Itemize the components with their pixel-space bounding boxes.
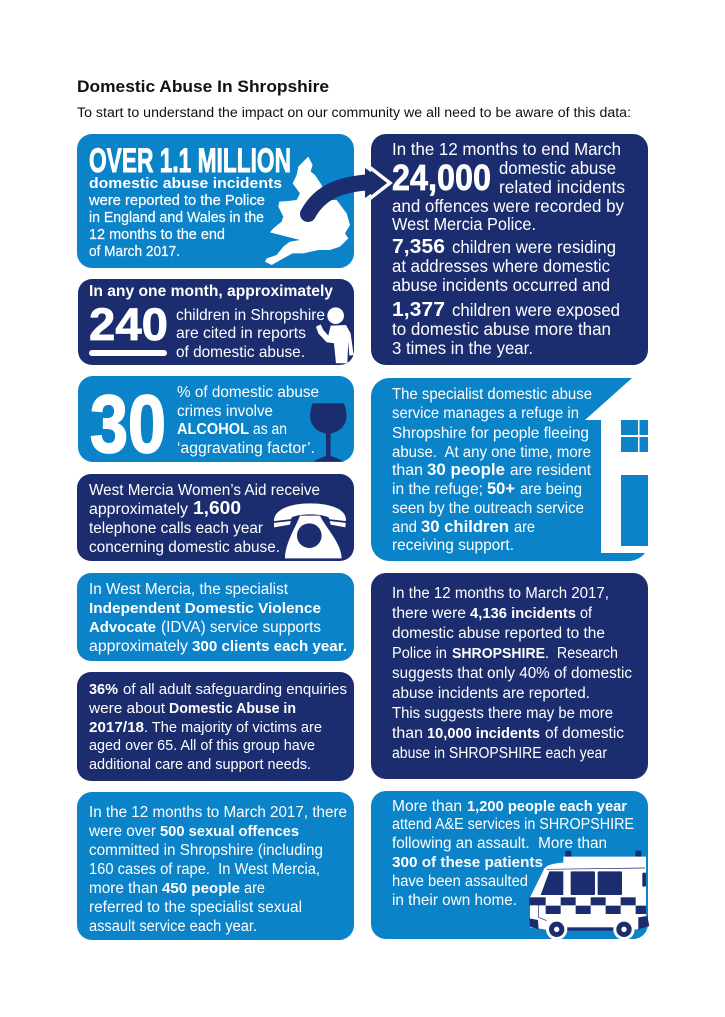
- panel text: in the refuge;: [392, 481, 483, 498]
- panel text: children were exposed: [452, 300, 620, 320]
- panel text: The specialist domestic abuse: [392, 386, 592, 403]
- panel: incidents in Shropshire: Police in: [392, 645, 447, 662]
- panel text: of domestic abuse.: [176, 344, 305, 361]
- panel text: 1,377: [392, 299, 445, 321]
- panel: IDVA service: 300 clients each year.: [192, 638, 347, 655]
- panel text: 3 times in the year.: [392, 338, 533, 358]
- panel: incidents in Shropshire: of domestic: [545, 725, 624, 742]
- icon: house window: [621, 420, 648, 452]
- icon: wine glass: [310, 403, 346, 462]
- panel text: of March 2017.: [89, 244, 180, 260]
- icon: house door: [621, 475, 648, 546]
- panel text: 30 people: [427, 460, 505, 479]
- panel: 240 children: [78, 279, 354, 365]
- panel: incidents in Shropshire: abuse in SHROPSHIRE each year: [392, 745, 607, 762]
- panel: sexual offences: are: [244, 880, 265, 897]
- panel text: were reported to the Police: [88, 193, 265, 209]
- panel text: as an: [253, 421, 287, 438]
- panel: incidents in Shropshire: [371, 573, 648, 779]
- panel: A&E attendance: attend A&E services in SHROPSHIRE: [392, 816, 634, 833]
- panel: A&E attendance: 1,200 people each year: [467, 798, 627, 815]
- panel: A&E attendance: More than: [392, 798, 462, 815]
- panel: sexual offences: [77, 792, 354, 940]
- panel: IDVA service: approximately: [89, 638, 188, 655]
- panel text: are cited in reports: [176, 325, 306, 342]
- panel text: West Mercia Women’s Aid receive: [89, 482, 320, 499]
- panel text: 7,356: [392, 236, 445, 258]
- panel: 24,000 incidents: [371, 134, 648, 365]
- panel text: ‘aggravating factor’.: [177, 440, 315, 457]
- panel text: [177, 384, 319, 457]
- panel text: than: [392, 462, 423, 479]
- panel text: service manages a refuge in: [392, 405, 579, 422]
- panel: adult safeguarding: Domestic Abuse in: [169, 700, 296, 717]
- panel text: 1,600: [193, 498, 241, 518]
- panel: sexual offences: In the 12 months to March 2017, there: [89, 804, 347, 821]
- panel: incidents in Shropshire: SHROPSHIRE: [452, 645, 545, 662]
- panel: A&E attendance: in their own home.: [392, 892, 517, 909]
- panel text: [88, 175, 282, 260]
- panel text: % of domestic abuse: [177, 384, 319, 401]
- panel: sexual offences: committed in Shropshire (including: [89, 842, 323, 859]
- panel: incidents in Shropshire: there were: [392, 605, 466, 622]
- panel text: [89, 482, 320, 556]
- panel: adult safeguarding: aged over 65. All of this group have: [89, 737, 315, 754]
- panel text: and: [392, 519, 417, 536]
- panel text: abuse incidents occurred and: [392, 275, 610, 295]
- arrow from map to 24,000: [308, 166, 390, 214]
- big number 24,000: 24,000: [392, 157, 491, 198]
- panel: A&E attendance: have been assaulted: [392, 873, 528, 890]
- big number 240: 240: [89, 299, 168, 350]
- panel text: In the 12 months to end March: [392, 139, 621, 159]
- panel: sexual offences: 160 cases of rape. In West Mercia,: [89, 861, 320, 878]
- panel: IDVA service: In West Mercia, the specialist: [89, 581, 289, 598]
- panel: sexual offences: more than: [89, 880, 158, 897]
- panel: incidents in Shropshire: 10,000 incidents: [427, 725, 540, 742]
- panel text: seen by the outreach service: [392, 500, 584, 517]
- panel text: [392, 139, 625, 358]
- panel text: ALCOHOL: [177, 421, 249, 438]
- panel text: related incidents: [499, 177, 625, 197]
- panel: incidents in Shropshire: than: [392, 725, 423, 742]
- panel text: Shropshire for people fleeing: [392, 425, 589, 442]
- panel text: receiving support.: [392, 537, 514, 554]
- panel text: domestic abuse incidents: [89, 175, 282, 192]
- panel: incidents in Shropshire: of: [580, 605, 593, 622]
- icon: child silhouette: [316, 307, 354, 363]
- panel: refuge house: [371, 378, 648, 561]
- panel: sexual offences: assault service each year.: [89, 918, 257, 935]
- subtitle: To start to understand the impact on our community we all need to be aware of this data:: [77, 105, 631, 120]
- panel: 30% alcohol: [78, 376, 354, 470]
- panel: incidents in Shropshire: abuse incidents are reported.: [392, 685, 590, 702]
- panel: IDVA service: (IDVA) service supports: [161, 619, 321, 636]
- panel text: [392, 386, 592, 554]
- panel text: are: [514, 519, 535, 536]
- panel: adult safeguarding: [77, 672, 354, 781]
- panel: sexual offences: were over: [88, 823, 156, 840]
- panel text: 50+: [487, 479, 515, 498]
- panel text: are being: [520, 481, 582, 498]
- panel: adult safeguarding: . The majority of victims are: [144, 719, 322, 736]
- icon: ambulance: [529, 851, 649, 940]
- panel: IDVA service: [77, 573, 354, 661]
- panel: A&E attendance: 300 of these patients: [392, 854, 543, 871]
- panel text: to domestic abuse more than: [392, 319, 611, 339]
- panel text: telephone calls each year: [89, 520, 263, 537]
- panel text: abuse. At any one time, more: [392, 444, 591, 461]
- heading: In any one month, approximately: [89, 283, 333, 300]
- panel: adult safeguarding: of all adult safeguarding enquiries: [123, 681, 347, 698]
- panel text: crimes involve: [177, 403, 273, 420]
- panel: adult safeguarding: 36%: [89, 681, 118, 698]
- panel text: at addresses where domestic: [392, 256, 610, 276]
- icon: telephone: [274, 503, 346, 558]
- panel: incidents in Shropshire: domestic abuse reported to the: [392, 625, 605, 642]
- panel: sexual offences: 450 people: [162, 880, 240, 897]
- panel: A&E attendance: [371, 791, 649, 940]
- panel text: [176, 307, 325, 361]
- panel text: approximately: [89, 501, 188, 518]
- panel: sexual offences: 500 sexual offences: [160, 823, 299, 840]
- panel text: West Mercia Police.: [392, 214, 536, 234]
- panel text: children were residing: [452, 237, 616, 257]
- panel: IDVA service: Advocate: [89, 619, 156, 636]
- panel text: are resident: [510, 462, 592, 479]
- panel: adult safeguarding: additional care and support needs.: [89, 756, 311, 773]
- panel: incidents in Shropshire: . Research: [545, 645, 618, 662]
- panel: A&E attendance: following an assault. More than: [392, 835, 607, 852]
- panel text: 12 months to the end: [89, 227, 225, 243]
- panel text: domestic abuse: [499, 158, 616, 178]
- panel: telephone calls: [77, 474, 354, 561]
- panel text: concerning domestic abuse.: [89, 539, 280, 556]
- headline number: OVER 1.1 MILLION: [89, 142, 291, 180]
- icon: map of England and Wales: [265, 157, 350, 265]
- panel: adult safeguarding: were about: [88, 700, 166, 717]
- panel: over 1.1 million incidents: [77, 134, 354, 268]
- panel text: in England and Wales in the: [89, 210, 264, 226]
- panel text: 30 children: [421, 517, 509, 536]
- panel: incidents in Shropshire: suggests that only 40% of domestic: [392, 665, 632, 682]
- panel: adult safeguarding: 2017/18: [89, 719, 144, 736]
- panel: sexual offences: referred to the specialist sexual: [89, 899, 302, 916]
- panel text: children in Shropshire: [176, 307, 325, 324]
- panel: incidents in Shropshire: In the 12 months to March 2017,: [392, 585, 609, 602]
- big number 30: 30: [90, 379, 166, 470]
- panel: incidents in Shropshire: 4,136 incidents: [470, 605, 576, 622]
- panel text: and offences were recorded by: [392, 196, 624, 216]
- title: Domestic Abuse In Shropshire: [77, 77, 329, 96]
- panel: IDVA service: Independent Domestic Violence: [89, 600, 321, 617]
- panel: incidents in Shropshire: This suggests there may be more: [392, 705, 613, 722]
